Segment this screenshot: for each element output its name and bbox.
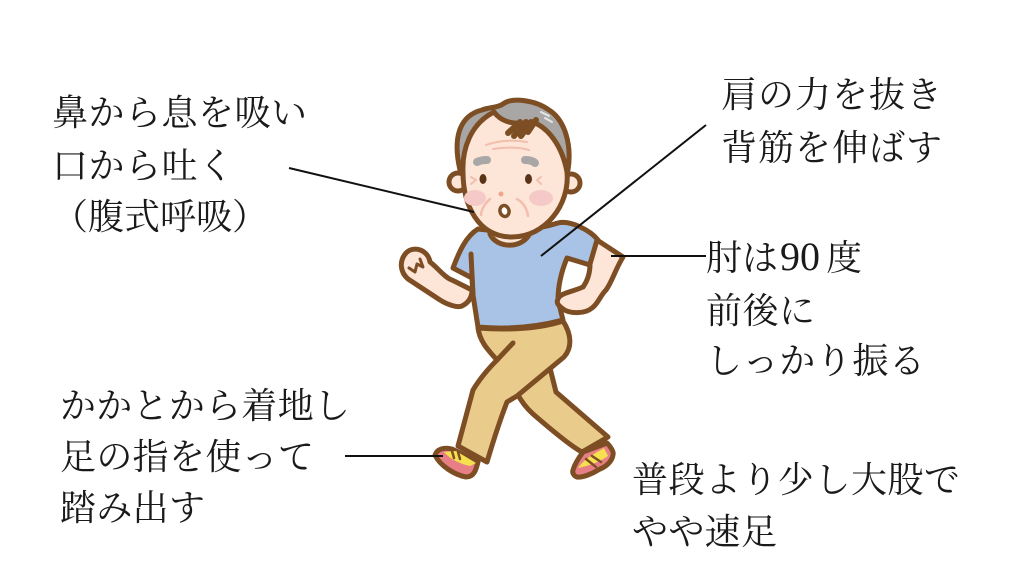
front leg and hips — [458, 321, 570, 462]
text block: elbow: 肘は — [706, 238, 778, 278]
text block: breathing: 口から吐く — [52, 146, 234, 186]
text block: breathing: （腹式呼吸） — [52, 197, 268, 237]
leader line: shoulders and back — [541, 125, 706, 256]
forehead wrinkles — [486, 141, 529, 150]
sleeve seam — [471, 254, 473, 295]
text block: breathing: 鼻から息を吸い — [52, 93, 307, 133]
front shoe — [435, 448, 478, 477]
mouth — [499, 205, 510, 217]
text block: shoulders and back — [721, 75, 942, 168]
neck collar — [490, 233, 530, 245]
leader line: breathing — [289, 168, 474, 212]
hair highlight — [541, 112, 552, 122]
text block: heel strike — [60, 386, 350, 528]
text block: elbow: 度 — [826, 238, 862, 278]
text block: shoulders and back: 肩の力を抜き — [721, 75, 942, 115]
text block: stride: やや速足 — [632, 512, 777, 552]
text block: elbow: 前後に — [706, 291, 815, 331]
crow's feet — [471, 177, 541, 184]
text block: elbow: 90 — [780, 234, 820, 279]
right ear — [562, 174, 580, 192]
text block: elbow — [706, 234, 925, 381]
text block: shoulders and back: 背筋を伸ばす — [721, 128, 942, 168]
left arm with fist — [401, 249, 472, 307]
back leg — [517, 368, 608, 452]
face — [463, 112, 567, 237]
nose — [498, 192, 504, 196]
smile lines — [481, 199, 528, 216]
hair — [457, 100, 569, 170]
eyes — [480, 174, 532, 184]
text block: breathing — [52, 93, 307, 237]
text block: heel strike: 足の指を使って — [60, 437, 314, 477]
text block: heel strike: 踏み出す — [60, 488, 205, 528]
text block: stride: 普段より少し大股で — [632, 460, 960, 500]
cheeks — [464, 190, 553, 206]
text block: stride — [632, 460, 960, 552]
right arm and hand — [557, 240, 623, 313]
leader line: foot — [345, 455, 443, 457]
text block: elbow: しっかり振る — [706, 341, 925, 381]
back shoe — [573, 443, 613, 477]
hair fringe — [508, 120, 536, 136]
trouser crease — [497, 343, 513, 360]
leader line: elbow — [611, 255, 706, 257]
left ear — [449, 173, 467, 191]
text block: heel strike: かかとから着地し — [60, 386, 350, 426]
fist fingers — [409, 259, 423, 272]
T-shirt — [453, 222, 598, 328]
eyebrows — [477, 160, 535, 163]
walking man illustration — [401, 100, 623, 477]
